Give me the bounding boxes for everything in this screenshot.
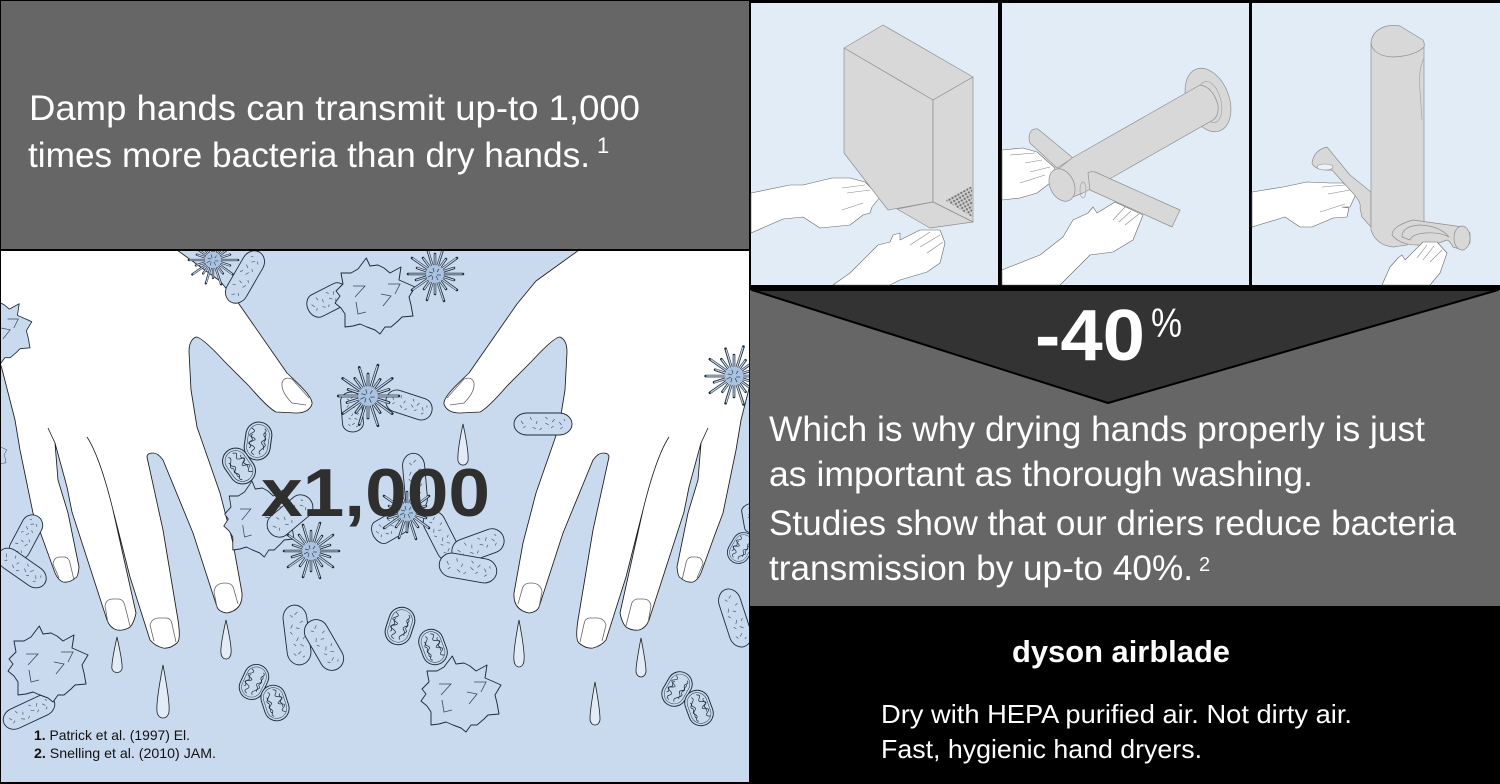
references: 2. Snelling et al. (2010) JAM. [34, 745, 216, 761]
body text: transmission by up-to 40%. [769, 549, 1193, 588]
icon: column dryer [1312, 26, 1470, 250]
illustration: water droplets [112, 424, 646, 725]
body text: Which is why drying hands properly is just [769, 410, 1425, 449]
tagline: Dry with HEPA purified air. Not dirty air. [881, 699, 1352, 729]
illustration: spiky cells [0, 258, 501, 732]
panel: column dryer [1252, 3, 1500, 285]
illustration: virus particles [189, 235, 763, 578]
big multiplier label: x1,000 [261, 455, 490, 531]
references [34, 727, 216, 761]
icon: hand reaching from left [1252, 182, 1357, 227]
icon: tap dryer [1029, 62, 1239, 227]
stat: minus 40 percent: -40 [1035, 296, 1145, 376]
heading text: damp hands: Damp hands can transmit up-to 1,000 [29, 89, 640, 128]
illustration: left hand [0, 250, 312, 648]
icon: hand reaching from left [751, 178, 880, 233]
stat: minus 40 percent: % [1151, 300, 1182, 346]
body text: 2 [1199, 554, 1210, 576]
panel: hands with bacteria illustration [0, 235, 767, 782]
heading text: damp hands: 1 [597, 133, 609, 158]
illustration: rod bacteria [0, 247, 767, 733]
heading text: damp hands [28, 89, 640, 175]
icon: hand reaching from left [1002, 148, 1055, 200]
panel: box hand dryer [751, 3, 998, 285]
panel: brand footer [750, 606, 1500, 784]
illustration: mitochondria-like microbes [217, 420, 759, 729]
icon: hand below tap [1002, 202, 1143, 285]
references: 1. Patrick et al. (1997) El. [34, 727, 190, 743]
heading text: damp hands: times more bacteria than dry hands. [28, 136, 590, 175]
tagline [881, 699, 1352, 764]
panel: reduction statement [750, 290, 1500, 606]
body text: Studies show that our driers reduce bacteria [769, 504, 1457, 543]
illustration: right hand [444, 250, 764, 648]
panel: damp hands statement [1, 1, 749, 249]
tagline: Fast, hygienic hand dryers. [881, 734, 1202, 764]
icon: hand below dryer [833, 230, 945, 285]
icon: hand below dryer [1382, 242, 1447, 285]
triangle callout [752, 290, 1498, 403]
body text [769, 410, 1457, 588]
panel: wall-mounted tap dryer [1002, 3, 1249, 285]
icon: box dryer [844, 25, 973, 228]
body text: as important as thorough washing. [769, 455, 1313, 494]
brand name: dyson airblade [1012, 634, 1230, 669]
